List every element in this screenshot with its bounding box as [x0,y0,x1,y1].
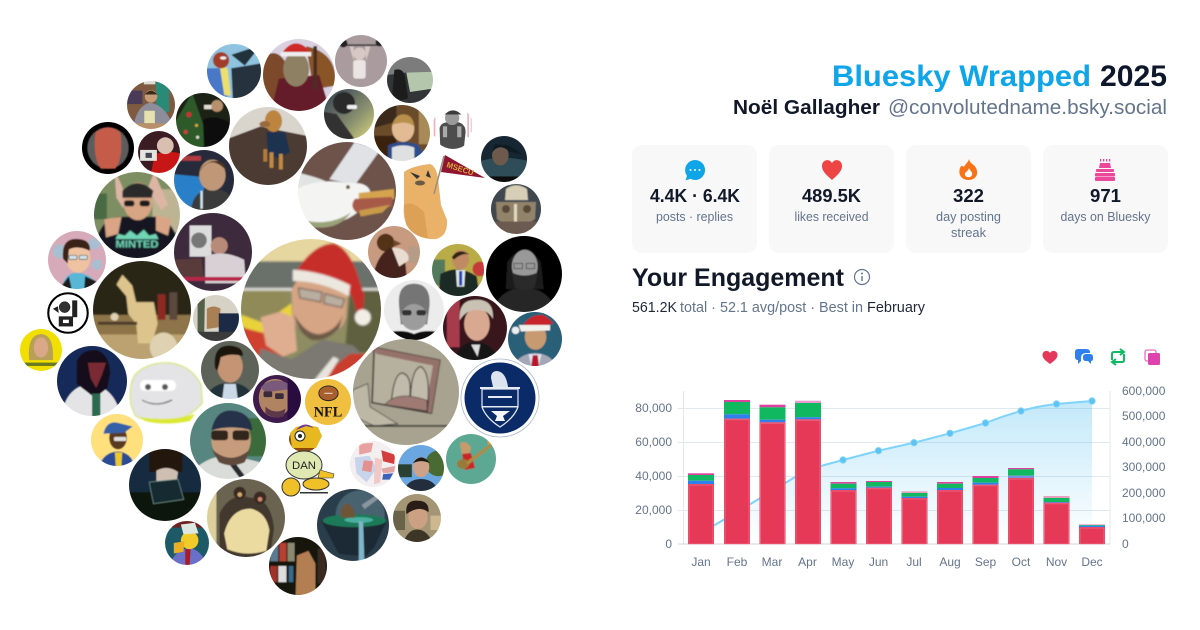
avatar: toddler in seahawks sweater [374,105,430,161]
header: title: Bluesky Wrapped [832,60,1091,93]
bar: Nov [1044,496,1070,544]
month labels: Apr [798,555,817,569]
right axis labels: 400,000 [1122,435,1166,449]
right axis labels: 500,000 [1122,409,1166,423]
avatar: painted dog [368,226,420,278]
avatar: white haired man on tv [443,296,507,360]
icon: yellow cartoon cat named Dan: DAN [292,460,316,472]
avatar: minted man with child: MINTED [116,240,159,251]
stat value: 489.5K [802,186,861,206]
icon: reposts legend [1112,349,1124,365]
bar: Feb [724,400,750,544]
avatar: cat on chair [193,295,239,341]
bar: May [830,482,856,544]
avatar: baby lifting bar [335,35,387,87]
engagement summary [632,300,926,316]
stat label: likes received [794,209,868,224]
stat label: day posting [936,209,1001,224]
avatar: dark haired man on tv [198,338,262,402]
avatar: bearded man black and white [486,236,562,312]
avatar: shocked man in dark [481,136,527,182]
month labels: Jul [906,555,922,569]
avatar: man in sunglasses and cap [186,399,271,483]
stat value: 971 [1090,186,1121,206]
avatar: red and blue map [350,441,396,487]
icon: angry bread with pennant: MSECU [445,160,475,178]
stat value: 4.4K · 6.4K [650,186,740,206]
month labels: Jun [869,555,888,569]
icon: info [854,270,870,284]
avatar: man at basketball arena [174,150,234,210]
avatar: man in bookstore [127,81,175,129]
right axis labels: 100,000 [1122,511,1166,525]
icon: cake [1095,159,1115,181]
avatar: baby with book [138,131,180,173]
icon: replies legend [1075,349,1093,364]
panel: posts and replies [632,145,757,253]
icon: chat bubble [685,160,705,180]
engagement chart [635,384,1166,569]
bar: Apr [795,401,821,544]
cumulative points [840,398,1095,463]
stat label: days on Bluesky [1060,209,1151,224]
avatar: smiling bearded man, purple light [253,375,301,423]
icon: angry bread with pennant [404,155,485,239]
avatar: man in santa hat, red tie [508,312,562,366]
avatar: santa monkey warrior [263,39,335,111]
month labels: May [832,555,854,569]
icon: likes legend [1042,351,1058,364]
chart legend [1042,349,1160,365]
month labels [691,555,1103,569]
avatar: boulder comic [324,89,374,139]
month labels: Oct [1012,555,1031,569]
month labels: Sep [975,555,996,569]
avatar: minted man with child [94,172,180,258]
avatar: car interior [387,57,433,103]
avatar: navy shield with eagle and anvil [461,359,539,437]
bar: Jun [866,481,892,544]
left axis labels [635,401,672,551]
avatar: head with hair bows [203,475,289,561]
header: year: 2025 [1100,60,1167,93]
avatar: man in metal helmet [384,280,444,340]
bar: Jan [688,473,714,544]
avatar: black and white stamp [47,292,89,334]
avatar: hooded figure with stripes [434,110,472,149]
header: display name: Noël Gallagher [733,97,880,119]
icon: yellow cartoon cat named Dan [282,424,334,496]
month labels: Aug [939,555,961,569]
stat value: 322 [953,186,984,206]
avatar: cartoon man in blue cap [88,411,146,469]
avatar: golden dog in sweater [229,107,307,185]
heading: your engagement: Your Engagement [632,264,845,292]
month labels: Mar [762,555,782,569]
left axis labels: 0 [665,537,672,551]
month labels: Feb [727,555,748,569]
bar: Sep [972,476,998,544]
avatar: llama sculpture scene [93,261,191,359]
panel: days on Bluesky [1043,145,1168,253]
icon: quotes legend [1145,350,1160,365]
cumulative area [701,401,1092,544]
avatar: man with glasses card face [174,213,252,291]
left axis labels: 20,000 [635,503,672,517]
bar: Jul [902,491,928,544]
bar: Dec [1079,524,1105,544]
avatar cluster [18,32,566,598]
avatar: red hair with black ring [82,122,134,174]
left axis labels: 60,000 [635,435,672,449]
avatar: painted man in suit [432,244,484,296]
month labels: Nov [1046,555,1067,569]
avatar: cartoon man in tie [48,231,106,289]
avatar: spider-man in suit [207,44,261,98]
engagement summary: 561.2K [632,300,677,316]
left axis labels: 40,000 [635,469,672,483]
avatar: NFL football [305,379,351,425]
avatar: man with glasses outdoors [398,445,444,491]
panel: likes received [769,145,894,253]
right axis labels: 200,000 [1122,486,1166,500]
stat label second line: streak [951,225,986,240]
stacked bars [688,400,1105,544]
icon: heart [822,160,842,180]
bar: Oct [1008,468,1034,544]
avatar: fox playing guitar [446,434,496,484]
avatar: seagull with hot dog [298,142,396,240]
right axis labels [1122,384,1166,551]
avatar: large santa hat man [241,239,381,379]
icon: smiling white blob [130,363,202,424]
header: handle: @convolutedname.bsky.social [888,97,1167,119]
bar: Mar [760,405,786,544]
avatar: christmas tree and man [176,93,230,147]
stat label: posts · replies [656,209,733,224]
cumulative line [701,401,1092,533]
avatar: hooded doctor [54,342,130,420]
avatar: dark tv in room [125,445,205,525]
engagement summary: total · 52.1 avg/post · Best in [680,300,863,316]
avatar: NFL football: NFL [314,405,342,421]
avatar: blonde woman on yellow [20,329,62,371]
left axis labels: 80,000 [635,401,672,415]
avatar: young man with curly hair [393,494,441,542]
avatar: owl creature [491,184,541,234]
month labels: Dec [1081,555,1103,569]
icon: flame [959,159,977,180]
engagement summary: February [867,300,926,316]
bar: Aug [937,482,963,544]
month labels: Jan [691,555,711,569]
right axis labels: 300,000 [1122,460,1166,474]
avatar: cat on floating disc world [317,489,389,561]
avatar: simpsons character [163,519,211,567]
right axis labels: 0 [1122,537,1129,551]
avatar: sketched couple in frame [353,339,459,445]
grid lines [678,391,1110,544]
right axis labels: 600,000 [1122,384,1166,398]
avatar: orange cat on bookshelf [269,537,327,595]
panel: day posting streak [906,145,1031,253]
